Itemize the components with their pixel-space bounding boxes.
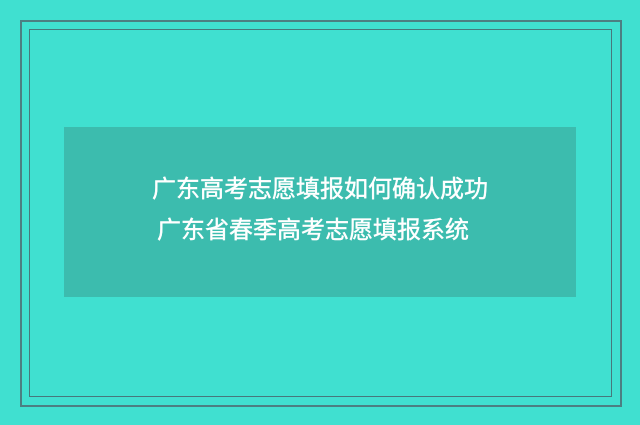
heading line 2: 广东省春季高考志愿填报系统 xyxy=(157,217,469,244)
panel: title band xyxy=(64,127,576,297)
inner frame xyxy=(29,29,612,397)
heading line 1: 广东高考志愿填报如何确认成功 xyxy=(152,176,488,203)
